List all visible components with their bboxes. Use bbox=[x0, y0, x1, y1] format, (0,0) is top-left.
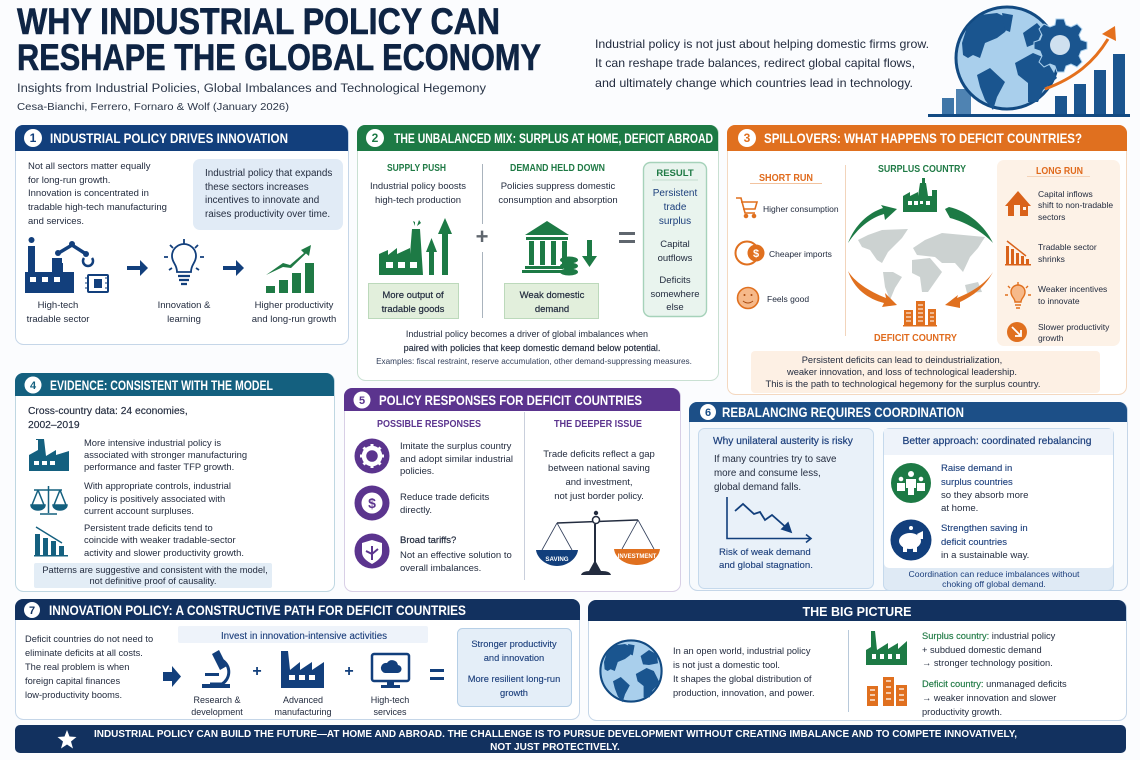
evidence: deficits bbox=[84, 522, 244, 558]
evidence: manufacturing: More intensive industrial policy is bbox=[84, 437, 221, 448]
divider bbox=[482, 164, 484, 318]
evidence: manufacturing: associated with stronger manufacturing bbox=[84, 449, 247, 460]
data note bbox=[28, 406, 188, 431]
short run: feels good: Feels good bbox=[767, 294, 809, 304]
equals sign bbox=[619, 232, 635, 243]
icon: surplus factory bbox=[903, 178, 937, 212]
flow labels: tradable sector bbox=[27, 314, 89, 325]
panel 7 text: The real problem is when bbox=[25, 662, 129, 672]
panel 7 header bbox=[15, 599, 580, 620]
intro text: It can reshape trade balances, redirect global capital flows, bbox=[595, 56, 915, 70]
evidence: manufacturing bbox=[84, 437, 247, 472]
flow labels: High-tech bbox=[38, 300, 78, 311]
flow labels: services bbox=[373, 707, 407, 717]
big picture header: THE BIG PICTURE bbox=[802, 605, 912, 619]
deficit text: productivity growth. bbox=[922, 707, 1002, 717]
response: tariffs bbox=[400, 535, 512, 574]
banner text: INDUSTRIAL POLICY CAN BUILD THE FUTURE—AT HOME AND ABROAD. THE CHALLENGE IS TO PURSUE DEVELOPMENT WITHOUT CREATING IMBALANCE AND TO COMPETE INNOVATIVELY, bbox=[94, 729, 1017, 740]
callout: expansion raises productivity: Industrial policy that expands bbox=[205, 168, 332, 179]
evidence: deficits: Persistent trade deficits tend to bbox=[84, 522, 213, 533]
panel 3 conclusion: Persistent deficits can lead to deindustrialization, bbox=[802, 355, 1002, 365]
panel 3 header bbox=[727, 125, 1127, 151]
result box: Persistent bbox=[653, 188, 697, 199]
closing banner bbox=[15, 725, 1126, 753]
plus: + bbox=[344, 663, 354, 680]
demand held down: DEMAND HELD DOWN bbox=[510, 163, 605, 174]
panel 1: industrial policy drives innovation bbox=[15, 125, 348, 344]
banner text bbox=[94, 729, 1017, 753]
big picture text: In an open world, industrial policy bbox=[673, 646, 811, 656]
icon: surplus factory bbox=[866, 631, 907, 665]
deeper issue text: Trade deficits reflect a gap bbox=[543, 449, 655, 460]
response: imitate: policies. bbox=[400, 466, 434, 477]
panel 2 conclusion bbox=[376, 329, 692, 366]
icon: factory with robot arm and chip bbox=[25, 237, 111, 293]
plus sign: + bbox=[476, 224, 488, 249]
left box: unilateral austerity: more and consume less, bbox=[714, 468, 821, 479]
action: strengthen saving: deficit countries bbox=[941, 537, 1007, 548]
panel 3 header: SPILLOVERS: WHAT HAPPENS TO DEFICIT COUNTRIES? bbox=[764, 130, 1082, 146]
panel 2 conclusion: paired with policies that keep domestic demand below potential. bbox=[404, 343, 660, 353]
flow labels: High-tech bbox=[371, 695, 409, 705]
big picture text: is not just a domestic tool. bbox=[673, 660, 780, 670]
evidence: manufacturing: performance and faster TFP growth. bbox=[84, 461, 234, 472]
arrow: to deficit (right) bbox=[945, 272, 993, 308]
divider bbox=[848, 630, 850, 712]
response: reduce: Reduce trade deficits bbox=[400, 492, 489, 503]
data note: Cross-country data: 24 economies, bbox=[28, 406, 188, 417]
panel 1 intro text bbox=[28, 161, 167, 227]
panel 6 header: REBALANCING REQUIRES COORDINATION bbox=[722, 404, 964, 420]
big picture text bbox=[673, 646, 815, 698]
result box: trade bbox=[664, 202, 687, 213]
authors: Cesa-Bianchi, Ferrero, Fornaro & Wolf (January 2026) bbox=[17, 102, 289, 113]
evidence: deficits: coincide with weaker tradable-sector bbox=[84, 534, 236, 545]
demand held down bbox=[498, 163, 618, 206]
response: tariffs: Broad tariffs? bbox=[400, 535, 456, 546]
panel 2 header: 2 bbox=[372, 131, 379, 145]
icon: saving and investment balance bbox=[536, 511, 660, 575]
panel 1 intro text: and services. bbox=[28, 216, 84, 227]
long run: tradable: Tradable sector bbox=[1038, 242, 1097, 252]
intro text: and ultimately change which countries lead in technology. bbox=[595, 76, 913, 90]
arrow bbox=[163, 666, 181, 687]
long run: incentives: Weaker incentives bbox=[1038, 284, 1107, 294]
icon: microscope bbox=[202, 650, 230, 688]
the deeper issue heading: THE DEEPER ISSUE bbox=[554, 419, 642, 430]
flow labels: and long-run growth bbox=[252, 314, 336, 325]
flow labels: Research & bbox=[193, 695, 241, 705]
icon: down arrow circle bbox=[1007, 322, 1027, 342]
short run heading: SHORT RUN bbox=[759, 173, 813, 184]
evidence: surpluses: policy is positively associated with bbox=[84, 493, 225, 504]
panel 3 conclusion bbox=[751, 351, 1100, 393]
outcome box: More resilient long-run bbox=[468, 674, 560, 684]
flow labels: Advanced bbox=[283, 695, 323, 705]
panel 5 header bbox=[344, 388, 680, 411]
world map bbox=[858, 229, 985, 300]
action: raise demand: so they absorb more bbox=[941, 490, 1028, 501]
panel 5 header: POLICY RESPONSES FOR DEFICIT COUNTRIES bbox=[379, 392, 642, 408]
result box: outflows bbox=[658, 253, 693, 264]
icon: people bbox=[891, 463, 931, 503]
action: raise demand: Raise demand in bbox=[941, 463, 1012, 474]
panel 1 header: INDUSTRIAL POLICY DRIVES INNOVATION bbox=[50, 130, 288, 146]
long run: tradable bbox=[1038, 242, 1097, 264]
deeper issue text bbox=[543, 449, 655, 502]
box: weak demand: demand bbox=[535, 304, 569, 315]
deficit text: Deficit country: unmanaged deficits bbox=[922, 679, 1067, 689]
panel 7 text bbox=[25, 634, 153, 700]
panel 2 header bbox=[357, 125, 718, 151]
panel 7 text: low-productivity booms. bbox=[25, 690, 122, 700]
deeper issue text: and investment, bbox=[565, 477, 633, 488]
response: reduce: directly. bbox=[400, 505, 432, 516]
intro text: Industrial policy is not just about helping domestic firms grow. bbox=[595, 37, 929, 51]
flow labels: learning bbox=[167, 314, 201, 325]
data note: 2002–2019 bbox=[28, 420, 80, 431]
callout: expansion raises productivity bbox=[193, 159, 343, 230]
left box: unilateral austerity: Why unilateral austerity is risky bbox=[713, 436, 854, 447]
panel 1 header bbox=[15, 125, 348, 151]
icon: scales bbox=[31, 486, 67, 514]
panel 1 header: 1 bbox=[30, 131, 37, 145]
big picture text: production, innovation, and power. bbox=[673, 688, 815, 698]
panel 4 header bbox=[15, 373, 334, 396]
icon: piggy bank bbox=[890, 520, 932, 560]
panel 2 conclusion: Industrial policy becomes a driver of global imbalances when bbox=[406, 329, 648, 339]
panel: the big picture bbox=[588, 600, 1126, 720]
arrow: to surplus (left) bbox=[848, 205, 897, 243]
right box: coordinated rebalancing: Better approach: coordinated rebalancing bbox=[903, 436, 1092, 447]
demand held down: Policies suppress domestic bbox=[501, 181, 616, 192]
icon: growth bars bbox=[266, 245, 314, 293]
outcome box bbox=[458, 628, 572, 706]
icon: cheaper imports coin bbox=[736, 242, 764, 264]
icon: globe bbox=[600, 640, 662, 702]
chart caption: and global stagnation. bbox=[719, 560, 813, 571]
long run box bbox=[997, 160, 1120, 346]
action: raise demand: surplus countries bbox=[941, 477, 1013, 488]
banner text: NOT JUST PROTECTIVELY. bbox=[490, 742, 620, 753]
icon: dollar bbox=[354, 486, 390, 520]
supply push: Industrial policy boosts bbox=[370, 181, 466, 192]
icon: monitor with cloud bbox=[372, 654, 409, 688]
icon: globe, gear and rising bars bbox=[928, 7, 1130, 117]
result box: else bbox=[666, 302, 684, 313]
panel 7 text: eliminate deficits at all costs. bbox=[25, 648, 143, 658]
result box: somewhere bbox=[650, 289, 700, 300]
icon: gear bbox=[354, 438, 390, 474]
surplus country label: SURPLUS COUNTRY bbox=[878, 164, 966, 175]
action: raise demand: at home. bbox=[941, 503, 978, 514]
long run: productivity: Slower productivity bbox=[1038, 322, 1110, 332]
flow labels: development bbox=[191, 707, 243, 717]
subtitle: Insights from Industrial Policies, Global Imbalances and Technological Hegemony bbox=[17, 81, 487, 95]
long run: capital inflows: shift to non-tradable bbox=[1038, 200, 1113, 210]
chart: falling demand bbox=[727, 497, 811, 542]
supply push bbox=[370, 163, 466, 206]
supply push: SUPPLY PUSH bbox=[387, 163, 446, 174]
panel 3 header: 3 bbox=[744, 131, 751, 145]
short run: imports: Cheaper imports bbox=[769, 249, 832, 259]
box: weak demand: Weak domestic bbox=[520, 290, 585, 301]
long run: capital inflows bbox=[1038, 189, 1113, 222]
flow labels bbox=[27, 300, 336, 325]
left box: unilateral austerity: global demand falls. bbox=[714, 482, 801, 493]
surplus text: → stronger technology position. bbox=[922, 658, 1053, 668]
arrow bbox=[223, 260, 244, 276]
icon: factory bbox=[281, 651, 324, 688]
result box: RESULT bbox=[656, 168, 694, 179]
panel 7 header: INNOVATION POLICY: A CONSTRUCTIVE PATH FOR DEFICIT COUNTRIES bbox=[49, 602, 466, 618]
panel 2 conclusion: Examples: fiscal restraint, reserve accumulation, other demand-suppressing measures. bbox=[376, 357, 692, 366]
coordination note: Coordination can reduce imbalances without bbox=[909, 569, 1080, 579]
icon: weak bulb bbox=[1005, 282, 1031, 308]
title: WHY INDUSTRIAL POLICY CAN bbox=[17, 1, 500, 42]
box: more output bbox=[368, 284, 458, 318]
title bbox=[17, 1, 541, 78]
action: strengthen saving: Strengthen saving in bbox=[941, 523, 1028, 534]
short run: consumption: Higher consumption bbox=[763, 204, 839, 214]
invest heading: Invest in innovation-intensive activities bbox=[221, 631, 387, 642]
icon: smile bbox=[738, 288, 758, 308]
panel 7 text: foreign capital finances bbox=[25, 676, 120, 686]
panel 4 header: 4 bbox=[30, 380, 37, 392]
response: reduce bbox=[400, 492, 489, 516]
panel 1 intro text: for long-run growth. bbox=[28, 175, 110, 186]
outcome box: Stronger productivity bbox=[471, 639, 557, 649]
action: strengthen saving bbox=[941, 523, 1029, 561]
long run: productivity bbox=[1038, 322, 1110, 343]
panel 7: innovation policy bbox=[15, 599, 580, 720]
intro text bbox=[595, 37, 929, 90]
divider bbox=[524, 412, 526, 580]
icon: deficit buildings bbox=[903, 301, 937, 326]
panel 7 text: Deficit countries do not need to bbox=[25, 634, 153, 644]
outcome box: and innovation bbox=[484, 653, 544, 663]
coordination note bbox=[909, 569, 1080, 589]
icon: house bbox=[1005, 191, 1031, 216]
evidence: surpluses bbox=[84, 480, 231, 516]
surplus text: + subdued domestic demand bbox=[922, 645, 1042, 655]
right box: coordinated rebalancing bbox=[884, 428, 1114, 590]
long run box: LONG RUN bbox=[1036, 166, 1083, 177]
icon: shrinking bars bbox=[1005, 241, 1031, 266]
flow labels: Innovation & bbox=[158, 300, 211, 311]
deeper issue text: not just border policy. bbox=[554, 491, 644, 502]
deficit country label: DEFICIT COUNTRY bbox=[874, 333, 957, 344]
icon: shopping cart bbox=[736, 198, 757, 218]
icon: falling bars bbox=[34, 527, 68, 556]
panel 2: the unbalanced mix bbox=[357, 125, 718, 380]
box: more output: tradable goods bbox=[382, 304, 445, 315]
panel 6 header: 6 bbox=[705, 407, 711, 419]
evidence: surpluses: With appropriate controls, industrial bbox=[84, 480, 231, 491]
invest heading bbox=[178, 626, 428, 643]
panel 3 conclusion: This is the path to technological hegemony for the surplus country. bbox=[766, 378, 1040, 389]
response: imitate: and adopt similar industrial bbox=[400, 454, 513, 465]
surplus text: Surplus country: industrial policy bbox=[922, 631, 1056, 641]
chart caption bbox=[719, 547, 813, 571]
panel 1 intro text: Innovation is concentrated in bbox=[28, 188, 149, 199]
supply push: high-tech production bbox=[375, 195, 461, 206]
callout: expansion raises productivity: raises productivity over time. bbox=[205, 209, 330, 220]
icon: deficit buildings bbox=[867, 677, 907, 706]
panel 2 header: THE UNBALANCED MIX: SURPLUS AT HOME, DEFICIT ABROAD bbox=[394, 130, 713, 146]
response: imitate: Imitate the surplus country bbox=[400, 441, 512, 452]
icon: bank with coins and down arrow bbox=[522, 221, 597, 276]
flow labels: Higher productivity bbox=[255, 300, 334, 311]
surplus text bbox=[922, 631, 1056, 668]
evidence: deficits: activity and slower productivity growth. bbox=[84, 547, 244, 558]
equals bbox=[430, 669, 444, 680]
outcome box: growth bbox=[500, 688, 528, 698]
response: imitate bbox=[400, 441, 513, 477]
flow labels bbox=[191, 695, 409, 717]
response: tariffs: Not an effective solution to bbox=[400, 550, 512, 561]
callout: expansion raises productivity: incentives to innovate and bbox=[205, 195, 319, 206]
panel 6 header bbox=[689, 402, 1127, 422]
long run: capital inflows: sectors bbox=[1038, 212, 1065, 222]
panel 3: spillovers bbox=[727, 125, 1127, 394]
deeper issue text: between national saving bbox=[548, 463, 650, 474]
long run: productivity: growth bbox=[1038, 333, 1064, 343]
icon: saving and investment balance: SAVING bbox=[545, 556, 569, 563]
callout: expansion raises productivity: these sectors increases bbox=[205, 182, 309, 193]
long run: capital inflows: Capital inflows bbox=[1038, 189, 1093, 199]
result box: surplus bbox=[659, 216, 691, 227]
arrow bbox=[127, 260, 148, 276]
caveat note: not definitive proof of causality. bbox=[90, 576, 216, 586]
panel 7 header: 7 bbox=[29, 605, 35, 617]
action: raise demand bbox=[941, 463, 1028, 514]
icon: dollar: $ bbox=[368, 495, 376, 511]
long run: tradable: shrinks bbox=[1038, 254, 1065, 264]
result box: Capital bbox=[660, 239, 690, 250]
icon: factory with up arrows bbox=[379, 218, 452, 275]
icon: shield bbox=[354, 534, 390, 568]
caveat note: Patterns are suggestive and consistent with the model, bbox=[42, 565, 268, 575]
deficit text: → weaker innovation and slower bbox=[922, 693, 1056, 703]
icon: factory bbox=[29, 439, 69, 471]
coordination note: choking off global demand. bbox=[942, 579, 1046, 589]
caveat note bbox=[34, 563, 272, 588]
title: RESHAPE THE GLOBAL ECONOMY bbox=[17, 37, 541, 78]
panel 4 header: EVIDENCE: CONSISTENT WITH THE MODEL bbox=[50, 377, 273, 393]
long run: incentives: to innovate bbox=[1038, 296, 1080, 306]
icon: star bbox=[58, 730, 76, 748]
result box bbox=[644, 162, 706, 316]
box: weak demand bbox=[504, 284, 598, 318]
plus: + bbox=[252, 663, 262, 680]
icon: saving and investment balance: INVESTMENT bbox=[618, 554, 657, 560]
icon: cheaper imports coin: $ bbox=[753, 248, 759, 260]
demand held down: consumption and absorption bbox=[498, 195, 618, 206]
flow labels: manufacturing bbox=[274, 707, 332, 717]
long run: incentives bbox=[1038, 284, 1107, 306]
panel 5: policy responses bbox=[344, 388, 680, 592]
box: more output: More output of bbox=[382, 290, 444, 301]
result box: Deficits bbox=[659, 275, 691, 286]
response: tariffs: overall imbalances. bbox=[400, 563, 481, 574]
possible responses heading: POSSIBLE RESPONSES bbox=[377, 419, 481, 430]
deficit text bbox=[922, 679, 1067, 717]
action: strengthen saving: in a sustainable way. bbox=[941, 550, 1029, 561]
panel 5 header: 5 bbox=[359, 395, 365, 407]
big picture header bbox=[588, 600, 1126, 621]
panel 4: evidence bbox=[15, 373, 334, 592]
left box: unilateral austerity bbox=[698, 428, 874, 588]
icon: light bulb bbox=[164, 239, 204, 284]
arrow: from surplus (right) bbox=[945, 207, 993, 243]
panel 1 intro text: Not all sectors matter equally bbox=[28, 161, 151, 172]
panel 6: rebalancing requires coordination bbox=[689, 402, 1128, 590]
left box: unilateral austerity: If many countries try to save bbox=[714, 454, 837, 465]
evidence: surpluses: current account surpluses. bbox=[84, 505, 194, 516]
panel 3 conclusion: weaker innovation, and loss of technological leadership. bbox=[786, 367, 1017, 377]
panel 1 intro text: tradable high-tech manufacturing bbox=[28, 202, 167, 213]
arrow: to deficit (left) bbox=[848, 271, 897, 307]
divider bbox=[844, 165, 846, 336]
big picture text: It shapes the global distribution of bbox=[673, 674, 812, 684]
chart caption: Risk of weak demand bbox=[719, 547, 811, 558]
